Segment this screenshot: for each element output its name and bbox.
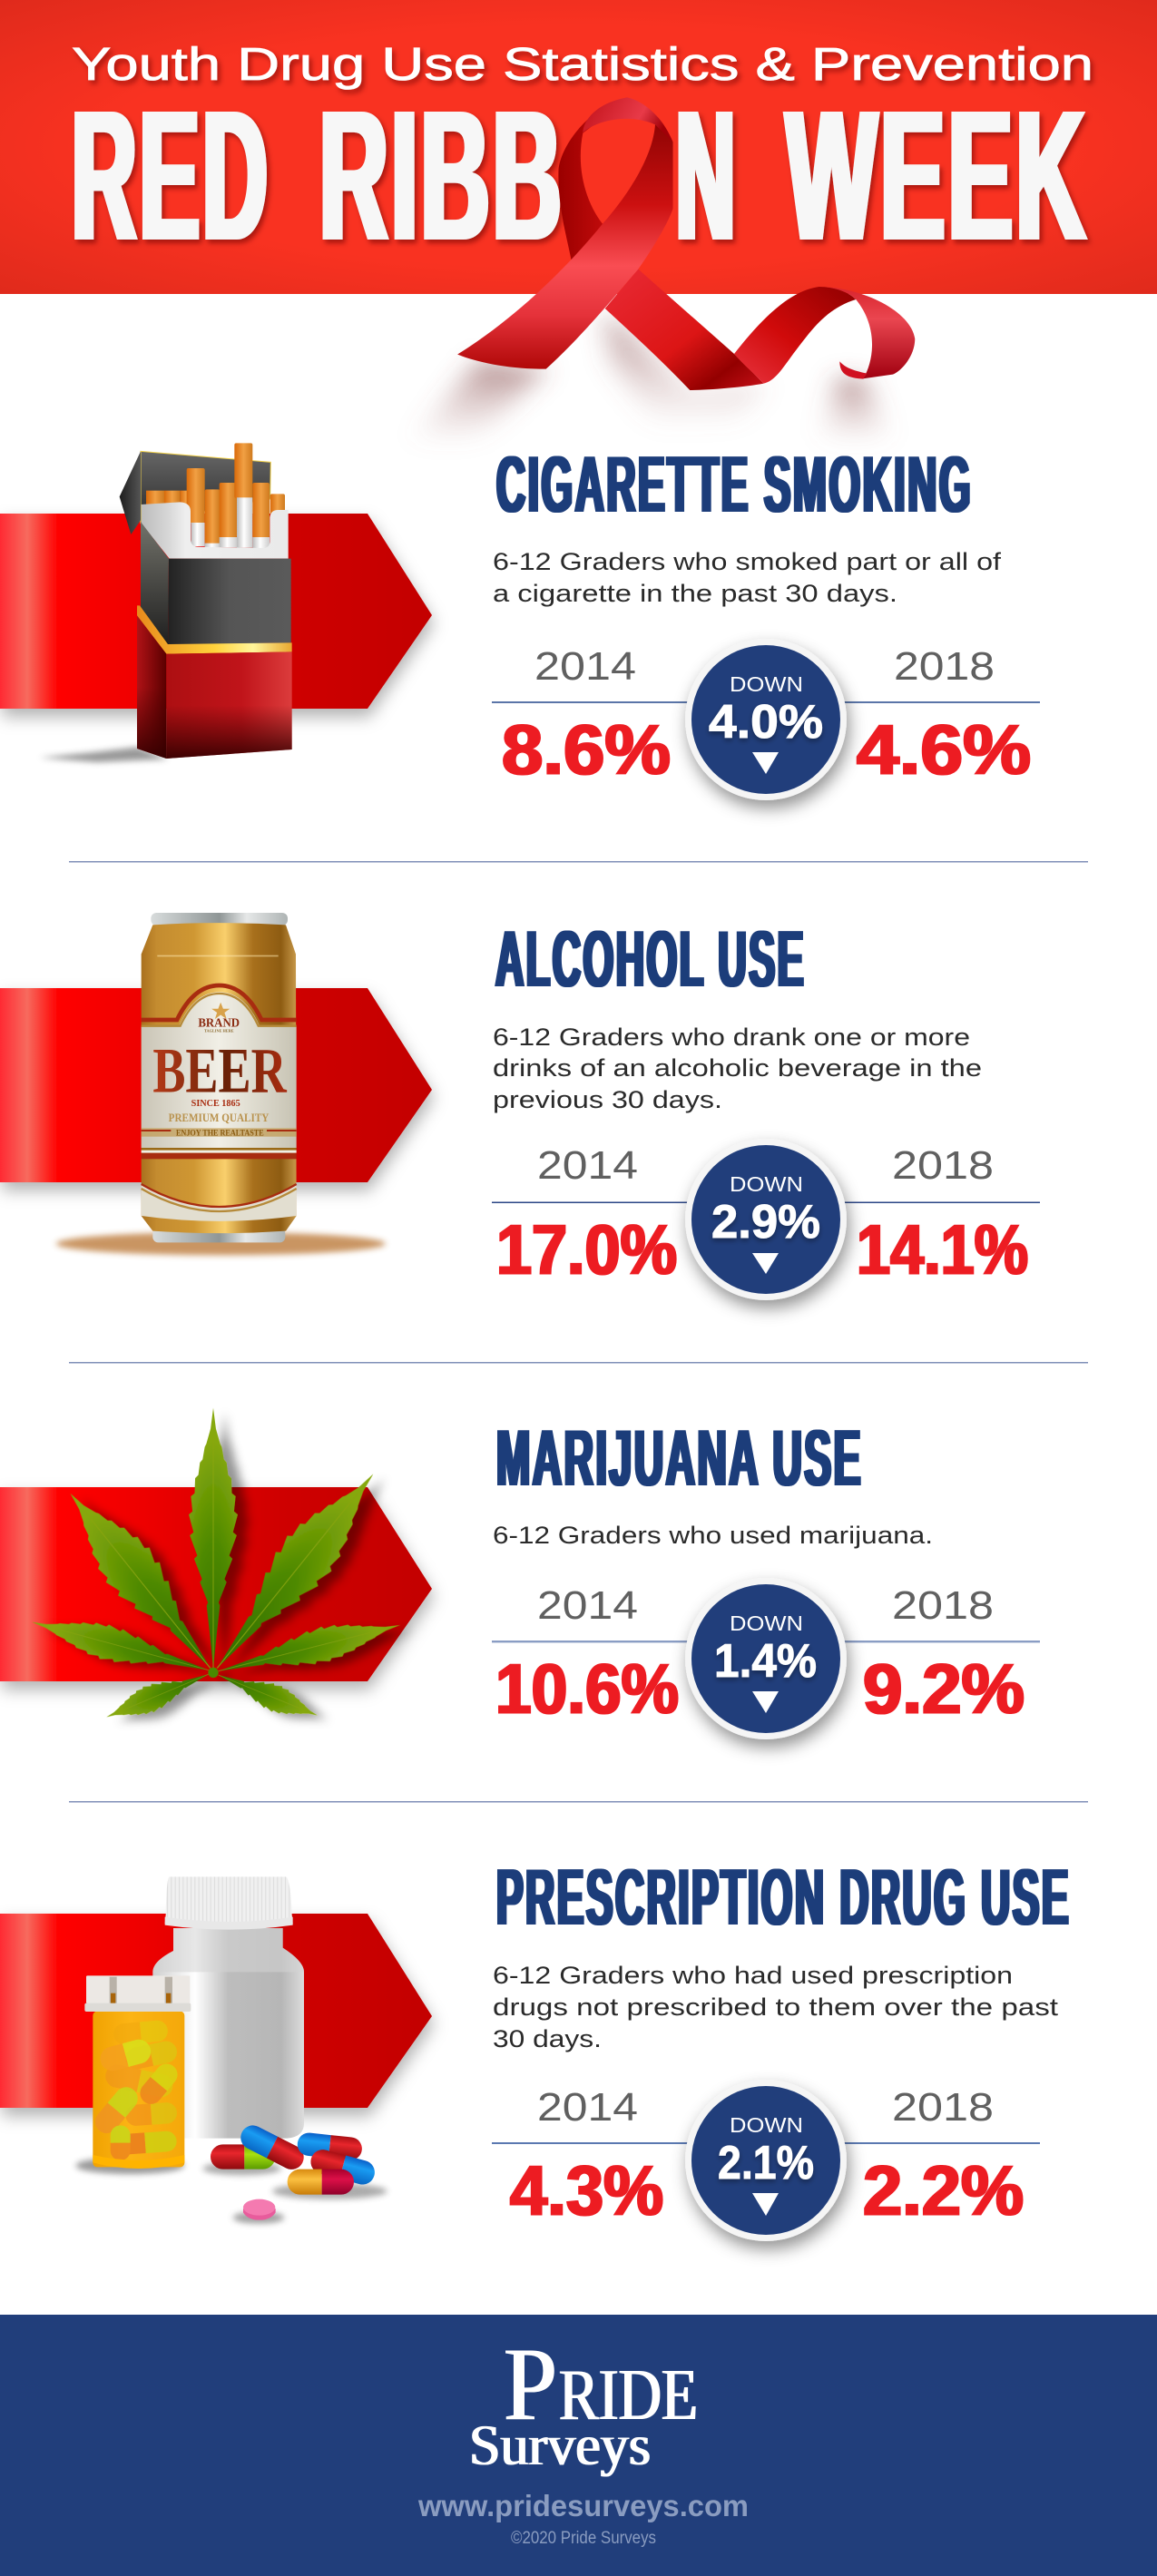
statistic comparison bbox=[492, 1139, 1040, 1300]
icon: pill bottles and capsules bbox=[75, 1876, 387, 2224]
description bbox=[493, 548, 1002, 607]
ribbon curl front bbox=[734, 287, 856, 384]
statistic comparison: 14.1% bbox=[857, 1210, 1028, 1289]
statistic comparison: 4.3% bbox=[510, 2150, 663, 2230]
statistic comparison: 4.6% bbox=[857, 710, 1031, 789]
icon: beer can: TAGLINE HERE bbox=[204, 1028, 234, 1033]
statistic comparison: 2014 bbox=[534, 644, 636, 689]
copyright: ©2020 Pride Surveys bbox=[511, 2529, 656, 2548]
statistic comparison: 10.6% bbox=[495, 1649, 679, 1729]
header banner bbox=[0, 0, 1157, 294]
description: 6-12 Graders who used marijuana. bbox=[493, 1522, 933, 1549]
icon: beer can: BEER bbox=[152, 1035, 287, 1106]
description: drinks of an alcoholic beverage in the bbox=[493, 1054, 982, 1082]
change badge bbox=[685, 2080, 847, 2241]
subtitle: Youth Drug Use Statistics & Prevention bbox=[72, 38, 1093, 90]
statistic comparison bbox=[492, 1578, 1040, 1739]
statistic comparison: 2018 bbox=[892, 1143, 994, 1188]
statistic comparison: 2018 bbox=[894, 644, 995, 689]
description: previous 30 days. bbox=[493, 1086, 722, 1113]
main title: N bbox=[676, 72, 738, 279]
ribbon loop top bbox=[583, 97, 673, 142]
description bbox=[493, 1962, 1059, 2052]
section: prescription drug use bbox=[0, 1852, 1071, 2241]
section: cigarette smoking bbox=[0, 439, 1040, 800]
section: alcohol use bbox=[0, 913, 1040, 1300]
description: 30 days. bbox=[493, 2025, 602, 2052]
logo: Pride Surveys: Surveys bbox=[469, 2413, 651, 2477]
ribbon back strand bbox=[558, 97, 627, 263]
statistic comparison: 2014 bbox=[537, 2085, 638, 2130]
description: a cigarette in the past 30 days. bbox=[493, 580, 897, 607]
ribbon curl back bbox=[819, 287, 915, 378]
section: alcohol use: ALCOHOL USE bbox=[495, 914, 806, 1004]
icon: cigarette pack bbox=[39, 443, 292, 762]
red arrow band bbox=[0, 1487, 432, 1681]
change badge bbox=[685, 1578, 847, 1739]
change badge: 2.1% bbox=[718, 2137, 814, 2189]
statistic comparison: 17.0% bbox=[496, 1210, 677, 1289]
footer band bbox=[0, 2315, 1157, 2576]
red arrow band bbox=[0, 514, 432, 709]
ribbon rear leg bbox=[605, 269, 764, 390]
change badge: DOWN bbox=[730, 1172, 803, 1196]
icon: beer can: PREMIUM QUALITY bbox=[169, 1112, 269, 1124]
red arrow band bbox=[0, 988, 432, 1182]
icon: beer can bbox=[56, 913, 386, 1255]
divider bbox=[69, 861, 1088, 862]
main title: RIBB bbox=[319, 72, 564, 279]
statistic comparison: 8.6% bbox=[502, 710, 671, 789]
statistic comparison: 2.2% bbox=[863, 2150, 1024, 2230]
description: 6-12 Graders who smoked part or all of bbox=[493, 548, 1002, 575]
change badge: DOWN bbox=[730, 672, 803, 696]
statistic comparison: 2018 bbox=[892, 2085, 994, 2130]
description: 6-12 Graders who had used prescription bbox=[493, 1962, 1013, 1989]
logo: Pride Surveys: P bbox=[504, 2326, 557, 2442]
icon: beer can: BRAND bbox=[198, 1016, 240, 1030]
statistic comparison: 2018 bbox=[892, 1583, 994, 1628]
change badge: 4.0% bbox=[709, 696, 823, 749]
description: drugs not prescribed to them over the past bbox=[493, 1993, 1059, 2021]
change badge: 2.9% bbox=[711, 1196, 820, 1249]
change badge bbox=[685, 1139, 847, 1300]
logo: Pride Surveys: RIDE bbox=[559, 2354, 698, 2435]
main title: RED bbox=[72, 72, 270, 279]
description bbox=[493, 1024, 982, 1113]
icon: cannabis leaf bbox=[27, 1408, 405, 1730]
description: 6-12 Graders who drank one or more bbox=[493, 1024, 970, 1051]
statistic comparison bbox=[492, 2080, 1040, 2241]
logo: Pride Surveys bbox=[469, 2326, 698, 2477]
ribbon shadows bbox=[409, 311, 889, 445]
divider bbox=[69, 1362, 1088, 1363]
statistic comparison: 2014 bbox=[537, 1583, 638, 1628]
change badge: 1.4% bbox=[714, 1635, 817, 1688]
statistic comparison: 9.2% bbox=[863, 1649, 1025, 1729]
statistic comparison: 2014 bbox=[537, 1143, 638, 1188]
ribbon tail bbox=[839, 361, 867, 379]
red arrow band bbox=[0, 1914, 432, 2108]
change badge bbox=[685, 639, 847, 800]
change badge: DOWN bbox=[730, 1611, 803, 1635]
ribbon front strand bbox=[457, 123, 673, 369]
website: www.pridesurveys.com bbox=[417, 2489, 749, 2522]
change badge: DOWN bbox=[730, 2113, 803, 2137]
statistic comparison bbox=[492, 639, 1040, 800]
icon: beer can: SINCE 1865 bbox=[191, 1098, 240, 1109]
section: marijuana use bbox=[0, 1408, 1040, 1739]
icon: beer can: ENJOY THE REALTASTE bbox=[176, 1130, 264, 1139]
divider bbox=[69, 1801, 1088, 1802]
main title bbox=[72, 72, 1089, 279]
red ribbon icon bbox=[409, 97, 915, 445]
